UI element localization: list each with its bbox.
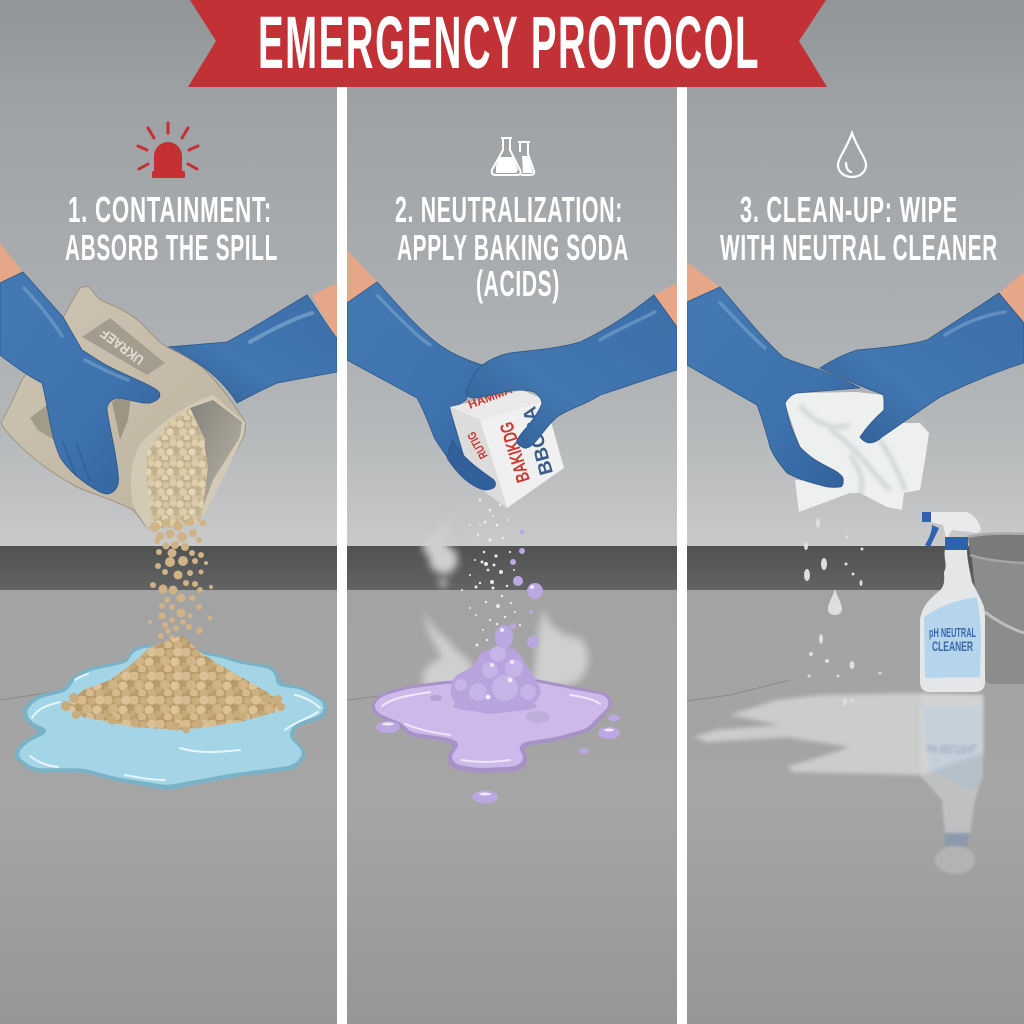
wall, baseboard and floor — [347, 0, 677, 1024]
spray bottle — [920, 512, 985, 692]
foam mound and bubbles — [376, 530, 620, 804]
red ribbon — [188, 0, 827, 87]
spray bottle: pH NEUTRAL — [929, 625, 976, 640]
falling granule stream — [148, 518, 213, 641]
right glove and arm — [167, 283, 337, 403]
left glove and arm — [347, 250, 496, 490]
smoke clouds — [418, 546, 592, 686]
right glove and arm — [466, 283, 677, 448]
white cloth — [785, 392, 929, 512]
puddle: blue spill — [11, 644, 329, 790]
panel 2: neutralization — [347, 0, 677, 1024]
wall, baseboard and floor — [0, 0, 337, 1024]
panel 1: containment — [0, 0, 337, 1024]
granule bag — [1, 286, 245, 530]
wall, baseboard and floor — [687, 0, 1024, 1024]
heading: step 2 — [395, 189, 629, 304]
granule pile — [61, 635, 285, 734]
baking soda box — [450, 382, 564, 508]
bucket — [967, 533, 1024, 684]
left glove and arm — [687, 262, 860, 487]
heading: step 3 — [720, 196, 997, 260]
heading: step 1: ABSORB THE SPILL — [65, 227, 278, 268]
baking soda box: BAKIKDG — [497, 419, 535, 485]
heading: step 1 — [66, 196, 277, 260]
baking soda box: HAMMA — [466, 382, 514, 412]
baking soda box: RUTIG — [464, 429, 491, 461]
granule bag: UKRAEF — [97, 325, 147, 368]
left fingers over box — [447, 440, 496, 490]
spray bottle: CLEANER — [932, 638, 973, 654]
baking soda powder — [461, 494, 521, 646]
panel 3: clean-up — [687, 0, 1024, 1024]
right glove and arm — [820, 272, 1024, 443]
left glove and arm — [0, 243, 160, 494]
falling water drops — [804, 518, 882, 706]
heading: step 2: APPLY BAKING SODA — [397, 227, 629, 268]
bottle reflection — [920, 695, 983, 874]
heading: step 2: (ACIDS) — [476, 263, 560, 304]
heading: step 1: 1. CONTAINMENT: — [68, 189, 272, 230]
baking soda box: BBOSA — [519, 404, 558, 477]
title banner — [188, 0, 827, 87]
icon: red siren — [138, 123, 198, 178]
wiped residue on floor — [694, 693, 983, 775]
icon: lab flasks — [492, 138, 534, 175]
bottle reflection: pH NEUTRAL — [927, 742, 977, 756]
heading: step 2: 2. NEUTRALIZATION: — [395, 189, 623, 230]
lavender puddle — [368, 679, 613, 773]
icon: water drop — [838, 133, 866, 177]
